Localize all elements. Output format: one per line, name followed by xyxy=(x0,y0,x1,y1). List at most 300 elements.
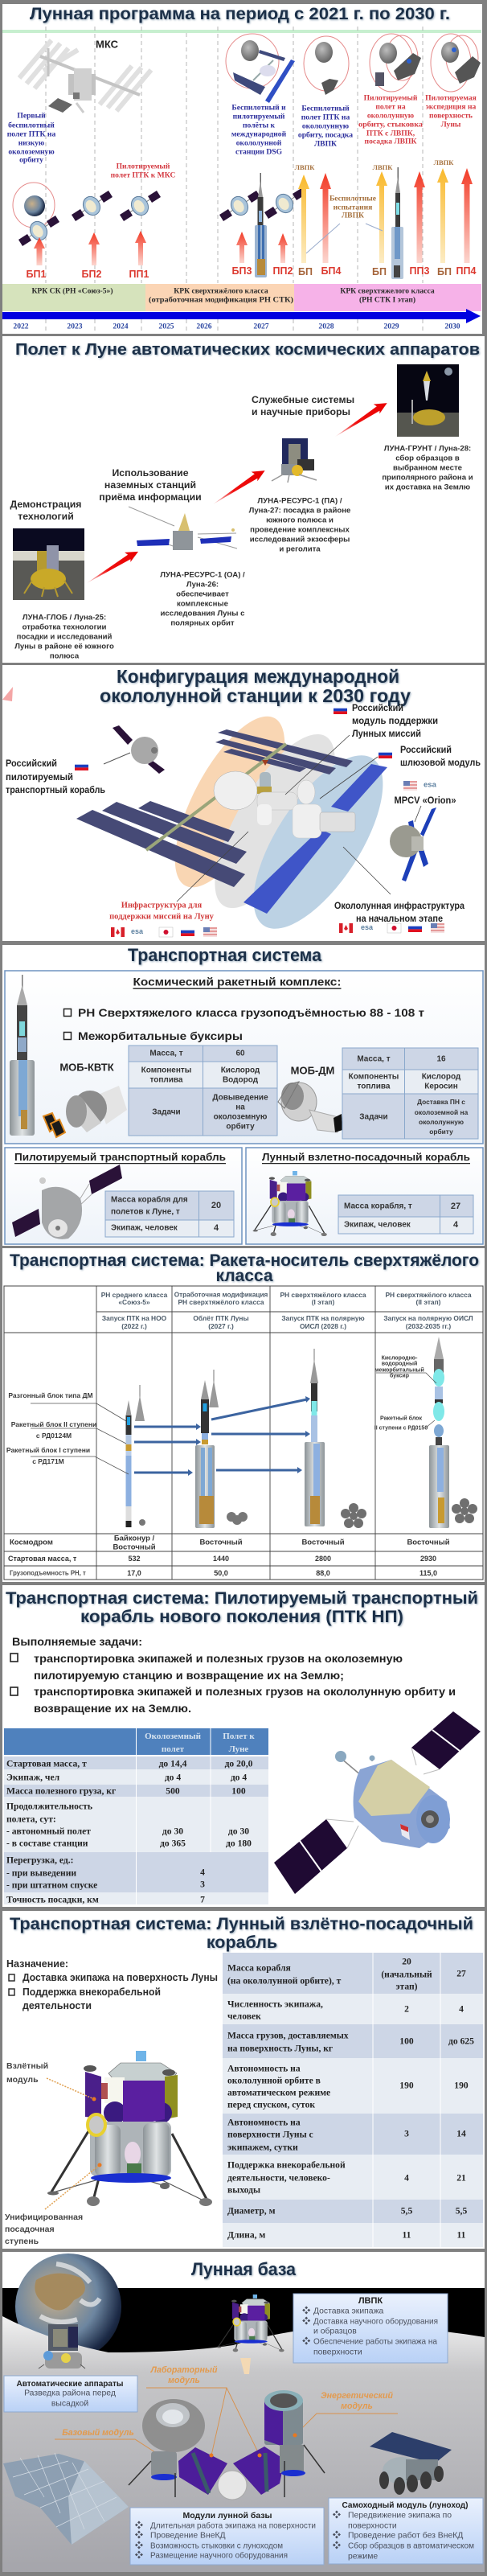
caption: first unmanned flight: орбиту xyxy=(19,156,43,164)
column headers: Запуск ПТК на полярную xyxy=(281,1314,365,1322)
column headers: Отработочная модификация xyxy=(174,1290,268,1298)
labels: module names: модуль xyxy=(341,2401,373,2411)
labels: right stage notes: буксир xyxy=(390,1372,409,1378)
row: cosmodrome: Восточный xyxy=(199,1538,243,1547)
label: ground stations: приёма информации xyxy=(99,491,202,503)
box: lander: ❖ xyxy=(302,2337,311,2347)
icon: payload xyxy=(209,1370,219,1407)
caption: crewed lunar orbit flight: посадка ЛВПК xyxy=(365,137,416,146)
caption: Luna-26: обеспечивает xyxy=(176,590,229,598)
table: MOB-DM: Компоненты xyxy=(349,1073,399,1081)
caption: Luna-27: исследований экзосферы xyxy=(250,536,350,544)
label: service systems xyxy=(252,394,354,417)
years: 2025 xyxy=(158,322,174,331)
caption: Luna-28 xyxy=(382,444,473,492)
table: lander parameters: Диаметр, м xyxy=(227,2205,276,2217)
labels: right stage notes: Ракетный блок xyxy=(380,1415,422,1422)
table: lander parameters: 100 xyxy=(399,2036,414,2046)
caption: DSG flights: станции DSG xyxy=(235,148,283,156)
box: rover: Сбор образцов в автоматическом xyxy=(348,2541,474,2551)
labels: module names xyxy=(62,2365,394,2438)
labels: module names: Энергетический xyxy=(321,2391,394,2401)
labels: right stage notes: Кислородно- xyxy=(382,1356,418,1361)
rocket: super-heavy I xyxy=(305,1349,325,1526)
labels: module names: Базовый модуль xyxy=(62,2428,134,2438)
table: lander parameters: Численность экипажа, xyxy=(227,1999,323,2009)
label: initial infrastructure: Окололунная инфраструктура xyxy=(334,902,465,911)
caption: lunar orbit flight xyxy=(298,105,353,148)
row: launch mass xyxy=(8,1555,436,1563)
flight labels: БП4 xyxy=(321,265,342,277)
caption: Luna-25: ЛУНА-ГЛОБ / Луна-25: xyxy=(23,613,106,622)
label: crew spacecraft xyxy=(6,759,105,795)
caption: DSG flights: международной xyxy=(231,130,287,138)
title: automatic spacecraft: Полет к Луне автоматических космических аппаратов xyxy=(15,340,480,359)
title: launch vehicle: Транспортная система: Ракета-носитель сверхтяжёлого xyxy=(10,1251,479,1270)
panel: transport system xyxy=(2,945,485,1246)
icon: flag Russia xyxy=(75,762,88,770)
arrow: to Luna-26 xyxy=(84,546,141,587)
caption: DSG flights: окололунной xyxy=(236,138,282,148)
table: spacecraft parameters: Масса полезного груза, кг xyxy=(6,1785,116,1797)
caption: crewed lunar orbit flight: Пилотируемый xyxy=(364,93,418,103)
labels: right stage notes: водородный xyxy=(382,1361,417,1367)
infrastructure ellipses xyxy=(153,701,407,948)
caption: first unmanned flight: Первый xyxy=(17,111,46,121)
arrows: flight launches xyxy=(34,168,473,265)
row: payload: Грузоподъемность РН, т xyxy=(10,1570,86,1576)
table: spacecraft parameters: - при выведении xyxy=(6,1867,76,1879)
panel: lunar lander spacecraft xyxy=(2,1911,485,2249)
column headers: Запуск ПТК на НОО xyxy=(102,1314,167,1322)
table: spacecraft parameters: 7 xyxy=(200,1895,205,1904)
table: spacecraft parameters: до 4 xyxy=(165,1773,181,1782)
table: MOB-KVTK: Водород xyxy=(223,1076,259,1084)
box: robotic craft: Автоматические аппараты xyxy=(16,2379,124,2389)
table: lander parameters: окололунной орбите в xyxy=(227,2075,321,2086)
label: airlock module: Российский xyxy=(400,746,452,755)
caption: Luna-28: ЛУНА-ГРУНТ / Луна-28: xyxy=(384,444,471,454)
title: lander spacecraft xyxy=(10,1914,473,1952)
table: spacecraft parameters: Экипаж, чел xyxy=(6,1773,60,1782)
label: Orion: MPCV «Orion» xyxy=(394,796,456,806)
caption: DSG flights: Беспилотный и xyxy=(231,103,286,113)
label: infrastructure for lunar missions: поддержки миссий на Луну xyxy=(109,912,215,922)
label: initial infrastructure xyxy=(334,902,465,924)
bullet: super-heavy rocket: РН Сверхтяжелого класса грузоподъёмностью 88 - 108 т xyxy=(78,1006,424,1019)
table: MOB-DM xyxy=(342,1048,478,1139)
label: ground stations: Использование xyxy=(112,467,189,479)
icon: Soyuz-5 cross-section xyxy=(139,1519,145,1526)
table: MOB-DM: Задачи xyxy=(359,1113,388,1121)
title: launch vehicle xyxy=(10,1251,479,1285)
label: ground stations: наземных станций xyxy=(104,479,196,491)
box: rover: режиме xyxy=(348,2553,378,2561)
label: crew spacecraft: транспортный корабль xyxy=(6,786,105,795)
band: Soyuz-5: КРК СК (РН «Союз-5») xyxy=(31,286,113,296)
illustration: Luna-26 orbiter xyxy=(129,507,237,550)
table: spacecraft parameters: 100 xyxy=(231,1785,246,1797)
table: lander parameters: Масса грузов, доставляемых xyxy=(227,2030,349,2041)
table: MOB-DM: окололунную xyxy=(419,1118,464,1126)
icon: Soyuz-5 payload xyxy=(135,1385,145,1421)
lander labels: ЛВПК xyxy=(295,163,315,171)
text: purpose: деятельности xyxy=(23,2000,92,2011)
box: rover: ❖ xyxy=(333,2541,342,2551)
lander labels: ЛВПК xyxy=(373,163,393,171)
labels: right stage notes: II ступени с РД0150 xyxy=(374,1425,428,1432)
table: MOB-DM: Масса, т xyxy=(357,1055,391,1063)
table: spacecraft parameters: до 365 xyxy=(160,1839,186,1848)
text: tasks: возвращение их на Землю. xyxy=(34,1702,191,1715)
table: MOB-DM: Доставка ПН с xyxy=(417,1098,465,1106)
label: landing stage xyxy=(5,2212,83,2246)
table: spacecraft parameters: - в составе станции xyxy=(6,1839,88,1848)
label: ascent module: модуль xyxy=(6,2075,39,2085)
caption: crewed lunar orbit flight: ПТК с ЛВПК, xyxy=(366,129,415,138)
row: launch mass: 532 xyxy=(128,1555,141,1563)
icon: Russian crew spacecraft xyxy=(104,725,165,774)
box: robotic craft: Разведка района перед xyxy=(24,2389,116,2398)
table: lander parameters: на поверхность Луны, кг xyxy=(227,2043,333,2054)
table: MOB-KVTK: на xyxy=(235,1103,245,1111)
table: lander parameters: (на окололунной орбите), т xyxy=(227,1975,342,1986)
flight labels: ПП4 xyxy=(456,265,477,277)
table: crew spacecraft: полетов к Луне, т xyxy=(111,1208,180,1216)
box: base modules: ❖ xyxy=(135,2541,144,2551)
table: spacecraft parameters: 3 xyxy=(200,1879,205,1890)
table: spacecraft parameters: 4 xyxy=(200,1867,205,1877)
title: crew transport spacecraft xyxy=(6,1588,478,1626)
table: spacecraft parameters: - при штатном спуске xyxy=(6,1880,97,1890)
table: spacecraft parameters: 500 xyxy=(166,1785,180,1797)
table: MOB-DM: околоземной на xyxy=(415,1108,469,1116)
column headers: (II этап) xyxy=(416,1298,441,1306)
labels: right stage notes: межорбитальный xyxy=(374,1367,424,1374)
flight labels: БП xyxy=(372,266,387,277)
box: lander: ❖ xyxy=(302,2307,311,2316)
image: Luna-Glob lander xyxy=(13,528,84,600)
caption: first unmanned flight xyxy=(7,111,55,164)
column headers: (2032-2035 гг.) xyxy=(406,1322,451,1330)
label: technology demo xyxy=(10,499,81,522)
table: lander parameters: Автономность на xyxy=(227,2117,301,2128)
caption: first unmanned flight: низкую xyxy=(18,138,44,148)
box: base modules: ❖ xyxy=(135,2551,144,2561)
label: ISS: МКС xyxy=(96,39,119,50)
table: lander parameters: этап) xyxy=(395,1982,418,1991)
table: spacecraft parameters: до 30 xyxy=(228,1826,249,1837)
caption: crewed flight to ISS xyxy=(111,162,175,180)
arrow: timeline xyxy=(2,309,481,323)
table: lunar lander: Экипаж, человек xyxy=(344,1221,411,1229)
table: MOB-DM: орбиту xyxy=(429,1128,453,1136)
flight labels: БП2 xyxy=(82,269,102,280)
icon: spacecraft 2023 xyxy=(72,191,113,221)
caption: Luna-28: выбранном месте xyxy=(393,463,462,473)
flight labels: БП xyxy=(298,266,313,277)
labels: left stage notes: с РД0124М xyxy=(36,1432,72,1440)
column headers xyxy=(101,1290,473,1330)
caption: Luna-27: ЛУНА-РЕСУРС-1 (ПА) / xyxy=(257,497,342,505)
arrowheads xyxy=(188,1396,310,1476)
illustration: station xyxy=(76,729,387,914)
table: spacecraft parameters: до 14,4 xyxy=(159,1758,187,1769)
label: technology demo: Демонстрация xyxy=(10,499,81,510)
labels: right stage notes xyxy=(374,1356,428,1432)
box: base modules: Проведение ВнеКД xyxy=(150,2532,226,2540)
row: launch mass: 2930 xyxy=(420,1555,436,1563)
flags: partners initial xyxy=(339,923,444,933)
arrows: stage heritage xyxy=(134,1399,307,1473)
caption: unmanned lander tests: ЛВПК xyxy=(342,211,364,220)
title: station configuration: Конфигурация международной xyxy=(117,666,399,687)
caption: Luna-27: Луна-27: посадка в районе xyxy=(249,507,350,515)
box: lander: Обеспечение работы экипажа на xyxy=(313,2337,437,2347)
flight labels: БП3 xyxy=(232,265,252,277)
rocket: super-heavy II xyxy=(429,1337,449,1528)
logo: esa: esa xyxy=(424,780,437,790)
caption: first unmanned flight: беспилотный xyxy=(8,121,55,130)
table: MOB-DM: топлива xyxy=(357,1083,391,1091)
label: MOB-DM: МОБ-ДМ xyxy=(291,1065,334,1076)
label: ascent module xyxy=(6,2061,48,2085)
label: technology demo: технологий xyxy=(18,511,74,522)
table: lander parameters: 2 xyxy=(404,2004,409,2014)
panel: crew transport spacecraft xyxy=(2,1585,485,1907)
table: lander parameters: автоматическом режиме xyxy=(227,2088,330,2097)
caption: unmanned lander tests xyxy=(329,195,377,220)
table: spacecraft parameters: - автономный полет xyxy=(6,1826,91,1837)
heading: crew spacecraft: Пилотируемый транспортный корабль xyxy=(14,1152,226,1163)
labels: left stage notes: Ракетный блок I ступени xyxy=(6,1446,90,1454)
table: lander parameters: Поддержка внекорабельной xyxy=(227,2160,346,2170)
table: MOB-KVTK: Довыведение xyxy=(212,1094,268,1102)
text: purpose: Доставка экипажа на поверхность Луны xyxy=(23,1972,218,1983)
illustration: landing spacecraft xyxy=(217,2295,284,2374)
caption: Luna-25: Луны в районе её южного xyxy=(14,642,114,651)
column headers: (I этап) xyxy=(312,1298,334,1306)
row: launch mass: 1440 xyxy=(213,1555,229,1563)
rocket: Soyuz-5 xyxy=(125,1400,132,1527)
lander labels xyxy=(295,158,454,171)
frame: rocket complex xyxy=(5,971,483,1144)
caption: first unmanned flight: околоземную xyxy=(8,148,55,156)
title: lunar programme: Лунная программа на период с 2021 г. по 2030 г. xyxy=(30,4,450,23)
caption: Luna-25 xyxy=(14,613,114,661)
label: crew spacecraft: пилотируемый xyxy=(6,773,73,783)
illustration: crew spacecraft xyxy=(274,1711,481,1894)
band: super-heavy stage I xyxy=(294,284,481,311)
icon: spacecraft 2024 xyxy=(120,191,161,221)
caption: crewed lunar orbit flight xyxy=(358,93,423,146)
table: MOB-KVTK: 60 xyxy=(235,1049,245,1058)
box: lander: и образцов xyxy=(313,2326,357,2336)
label: service systems: и научные приборы xyxy=(252,406,350,417)
rocket: super-heavy stage I xyxy=(391,167,403,279)
label: support module: Лунных миссий xyxy=(352,729,421,739)
box: base modules xyxy=(130,2508,324,2565)
table: spacecraft parameters: до 20,0 xyxy=(225,1758,253,1769)
table: lander parameters: 190 xyxy=(454,2080,469,2091)
years: 2024 xyxy=(113,322,129,331)
box: rover: Самоходный модуль (луноход) xyxy=(342,2500,468,2510)
table: lander parameters: до 625 xyxy=(448,2036,474,2046)
table: MOB-KVTK: Задачи xyxy=(152,1108,181,1116)
labels: left stage notes: Ракетный блок II ступени xyxy=(11,1420,96,1428)
row: payload: 50,0 xyxy=(214,1569,228,1577)
label: crew spacecraft: Российский xyxy=(6,759,57,769)
flight labels: ПП3 xyxy=(410,265,430,277)
years: 2026 xyxy=(196,322,212,331)
labels: left stage notes: с РД171М xyxy=(32,1457,64,1465)
panel: lunar base xyxy=(2,2252,485,2572)
table: MOB-KVTK: Компоненты xyxy=(141,1066,191,1074)
table: lunar lander xyxy=(338,1195,473,1234)
title: lander spacecraft: корабль xyxy=(207,1933,277,1952)
table: MOB-KVTK: околоземную xyxy=(214,1113,268,1121)
label: landing stage: ступень xyxy=(5,2237,39,2246)
label: ascent module: Взлётный xyxy=(6,2061,48,2071)
table: lander parameters: 11 xyxy=(457,2229,466,2241)
labels: left stage notes xyxy=(6,1391,96,1465)
illustration: DSG with Moon xyxy=(226,34,295,103)
icon: cross-section of three blocks xyxy=(227,1512,248,1525)
labels: left stage notes: Разгонный блок типа ДМ xyxy=(8,1391,93,1399)
icon: spacecraft ПП2 xyxy=(264,188,305,219)
illustration: MOB-DM tug xyxy=(278,1082,342,1132)
table: spacecraft parameters: до 180 xyxy=(226,1839,252,1848)
rocket: test modification xyxy=(195,1380,215,1528)
table: lander parameters: 14 xyxy=(456,2128,466,2139)
table: MOB-KVTK xyxy=(129,1046,277,1136)
icon: spacecraft БП3 xyxy=(219,191,260,221)
icon: flag Russia xyxy=(334,705,347,714)
row: payload: 115,0 xyxy=(419,1569,437,1577)
box: robotic craft xyxy=(4,2376,137,2412)
illustration: Moon and spacecraft xyxy=(304,36,349,95)
table: MOB-DM: Кислород xyxy=(422,1073,461,1081)
illustration: solar array xyxy=(3,2453,129,2545)
row: cosmodrome: Космодром xyxy=(10,1538,53,1547)
frame: lunar lander xyxy=(246,1148,483,1244)
caption: lunar surface expedition: поверхность xyxy=(429,111,473,121)
caption: crewed flight to ISS: Пилотируемый xyxy=(117,162,170,171)
label: ground stations xyxy=(99,467,202,503)
table: lander parameters: 3 xyxy=(404,2128,409,2139)
box: base modules: ❖ xyxy=(135,2530,144,2540)
arrows: lander launches xyxy=(298,168,448,263)
column headers: Запуск на полярную ОИСЛ xyxy=(383,1314,473,1322)
caption: Luna-26: полярных орбит xyxy=(170,619,235,627)
table: lander parameters: деятельности, человеко- xyxy=(227,2173,330,2183)
box: rover: Передвижение экипажа по xyxy=(348,2511,452,2521)
years: 2029 xyxy=(383,322,399,331)
row: cosmodrome xyxy=(10,1535,450,1552)
panel: super-heavy launch vehicle xyxy=(2,1248,485,1582)
table: spacecraft parameters xyxy=(4,1728,268,1904)
caption: crewed lunar orbit flight: полет на xyxy=(375,103,406,111)
label: support module xyxy=(352,704,438,739)
caption: Luna-25: полюса xyxy=(50,651,80,661)
illustration: energy module xyxy=(264,2390,325,2497)
table: MOB-KVTK: топлива xyxy=(149,1076,183,1084)
table: crew spacecraft: Экипаж, человек xyxy=(111,1224,178,1232)
illustration: Earth xyxy=(15,2253,121,2360)
table: MOB-DM: 16 xyxy=(436,1055,446,1063)
band: test modification: (отработочная модификация РН СТК) xyxy=(149,296,293,304)
box: base modules: Длительная работа экипажа на поверхности xyxy=(150,2521,316,2530)
table: lander parameters: 21 xyxy=(456,2173,466,2183)
table: lander parameters: поверхности Луны с xyxy=(227,2130,313,2139)
text: purpose: Назначение: xyxy=(6,1958,68,1970)
text: tasks: пилотируемую станцию и возвращение их на Землю; xyxy=(34,1669,344,1682)
box: base modules: ❖ xyxy=(135,2521,144,2530)
illustration: rocket xyxy=(10,975,35,1136)
column headers: ОИСЛ (2028 г.) xyxy=(300,1322,346,1330)
table: lander parameters: 4 xyxy=(459,2004,464,2014)
heading: rocket complex: Космический ракетный комплекс: xyxy=(133,976,341,988)
column headers: РН сверхтяжёлого класса xyxy=(178,1298,264,1306)
flight labels xyxy=(27,265,477,280)
table: lander parameters: (начальный xyxy=(381,1969,432,1980)
flags: partners for lunar missions xyxy=(111,927,217,937)
table: spacecraft parameters: Точность посадки, км xyxy=(6,1895,99,1904)
table: spacecraft parameters: до 4 xyxy=(231,1773,247,1782)
table: crew spacecraft: 20 xyxy=(211,1201,221,1210)
table: lander parameters: 5,5 xyxy=(401,2205,412,2217)
icon: cross-section of five blocks xyxy=(341,1503,366,1528)
illustration: Luna-27 lander xyxy=(272,438,317,483)
title: lander spacecraft: Транспортная система: Лунный взлётно-посадочный xyxy=(10,1914,473,1933)
caption: lunar orbit flight: орбиту, посадка xyxy=(298,130,353,140)
illustration: lunar rover xyxy=(370,2432,452,2495)
box: robotic craft: высадкой xyxy=(51,2400,88,2408)
label: support module: Российский xyxy=(352,704,403,713)
row: payload: 17,0 xyxy=(127,1569,141,1577)
illustration: base module xyxy=(129,2399,205,2497)
column headers: РН сверхтяжёлого класса xyxy=(385,1291,472,1299)
box: rover: ❖ xyxy=(333,2530,342,2540)
caption: Luna-27: южного полюса и xyxy=(266,516,334,524)
table: lander parameters: экипажем, сутки xyxy=(227,2143,298,2152)
title: lunar base: Лунная база xyxy=(191,2259,297,2279)
label: initial infrastructure: на начальном этапе xyxy=(356,914,443,924)
column headers: Облёт ПТК Луны xyxy=(193,1314,249,1322)
text: tasks: транспортировка экипажей и полезных грузов на окололунную орбиту и xyxy=(34,1685,456,1698)
column headers: РН сверхтяжёлого класса xyxy=(280,1291,366,1299)
moon surface xyxy=(2,2316,485,2572)
years: 2027 xyxy=(253,322,269,331)
title: station configuration: окололунной станции к 2030 году xyxy=(100,685,411,706)
caption: unmanned lander tests: Беспилотные xyxy=(329,195,377,203)
text: purpose: Поддержка внекорабельной xyxy=(23,1986,161,1998)
table: spacecraft parameters: Полет к xyxy=(223,1732,255,1741)
box: rover: ❖ xyxy=(333,2511,342,2521)
box: lander: Доставка экипажа xyxy=(313,2307,384,2316)
frame: crew spacecraft xyxy=(5,1148,242,1244)
text: tasks: транспортировка экипажей и полезных грузов на околоземную xyxy=(34,1652,403,1665)
caption: DSG flights: пилотируемый xyxy=(233,113,285,121)
caption: DSG flights xyxy=(231,103,287,156)
caption: Luna-25: посадки и исследований xyxy=(17,632,113,642)
table: lander parameters xyxy=(223,1953,483,2247)
table: MOB-DM: Керосин xyxy=(424,1083,458,1091)
label: infrastructure for lunar missions: Инфраструктура для xyxy=(121,901,203,910)
text: tasks: Выполняемые задачи: xyxy=(12,1635,142,1648)
labels: module names: модуль xyxy=(168,2376,200,2385)
table: lander parameters: перед спуском, суток xyxy=(227,2099,315,2110)
